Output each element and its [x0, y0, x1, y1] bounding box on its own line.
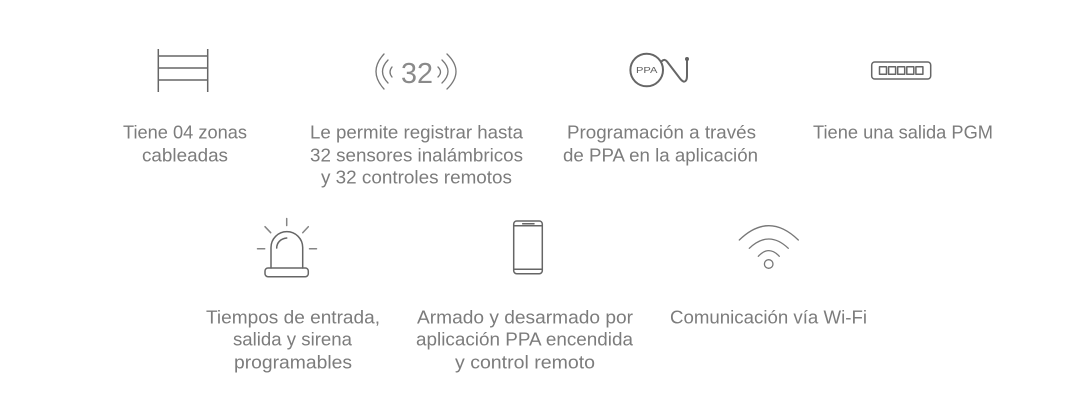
text: siren timers: [206, 308, 380, 373]
icon: PPA On: [630, 54, 689, 86]
icon: Wi-Fi: [739, 226, 798, 268]
icon: PGM output: [872, 62, 931, 79]
text: arming by app: y control remoto: [455, 353, 595, 373]
text: wired zones: cableadas: [142, 146, 228, 166]
text: wireless registration: y 32 controles remotos: [321, 168, 512, 188]
text: siren timers: programables: [234, 353, 352, 373]
icon: PPA On: PPA: [636, 65, 658, 75]
text: wireless registration: 32 sensores inalámbricos: [310, 146, 523, 166]
text: wired zones: [123, 123, 247, 166]
text: PPA programming: [563, 123, 758, 166]
icon: 32 wireless devices: 32: [401, 58, 433, 90]
text: arming by app: aplicación PPA encendida: [416, 330, 634, 350]
text: PGM output: Tiene una salida PGM: [813, 123, 993, 143]
icon: smartphone: [514, 221, 542, 274]
text: wired zones: Tiene 04 zonas: [123, 123, 247, 143]
text: arming by app: [416, 308, 634, 373]
text: siren timers: salida y sirena: [233, 330, 353, 350]
icon: wired zones: [158, 49, 208, 92]
text: arming by app: Armado y desarmado por: [417, 308, 633, 328]
icon: siren: [258, 218, 316, 277]
text: siren timers: Tiempos de entrada,: [206, 308, 380, 328]
text: PPA programming: Programación a través: [567, 123, 756, 143]
text: PPA programming: de PPA en la aplicación: [563, 146, 758, 166]
icon: 32 wireless devices: [376, 54, 456, 90]
text: Wi-Fi communication: Comunicación vía Wi-Fi: [670, 308, 867, 328]
text: wireless registration: [310, 123, 524, 188]
text: wireless registration: Le permite registrar hasta: [310, 123, 524, 143]
